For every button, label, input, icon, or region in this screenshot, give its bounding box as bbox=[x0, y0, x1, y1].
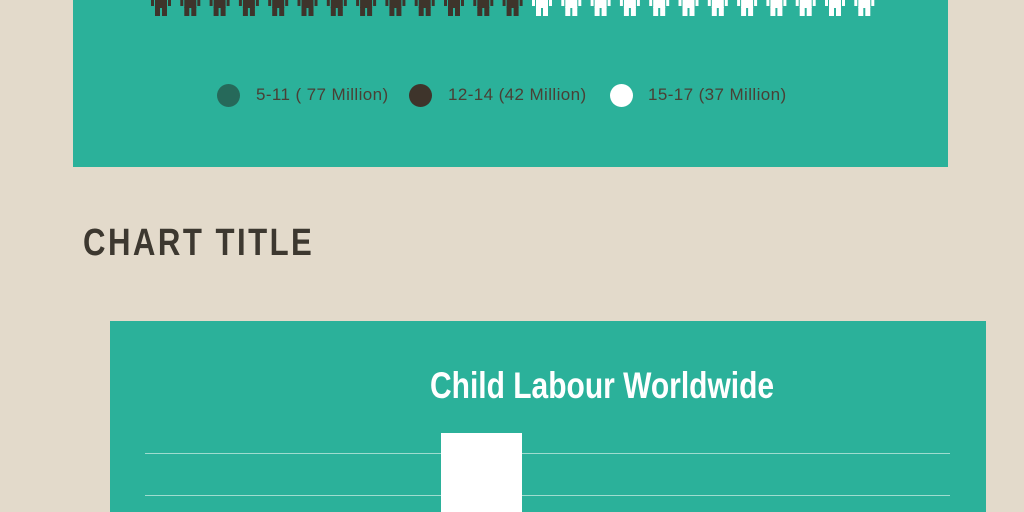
legend bbox=[217, 84, 787, 107]
legend item 15-17 bbox=[610, 84, 787, 107]
bar bbox=[441, 433, 522, 512]
chart title text: Child Labour Worldwide bbox=[430, 365, 774, 406]
legend item 15-17: 15-17 (37 Million) bbox=[648, 85, 787, 104]
icon row: children pictogram bbox=[151, 0, 874, 16]
legend item 5-11 bbox=[217, 84, 389, 107]
legend item 12-14: 12-14 (42 Million) bbox=[448, 85, 587, 104]
legend item 12-14 bbox=[409, 84, 587, 107]
legend item 5-11: 5-11 ( 77 Million) bbox=[256, 85, 389, 104]
heading: chart title: CHART TITLE bbox=[83, 222, 314, 264]
panel: bar chart bbox=[110, 321, 986, 512]
panel: age distribution bbox=[73, 0, 948, 167]
